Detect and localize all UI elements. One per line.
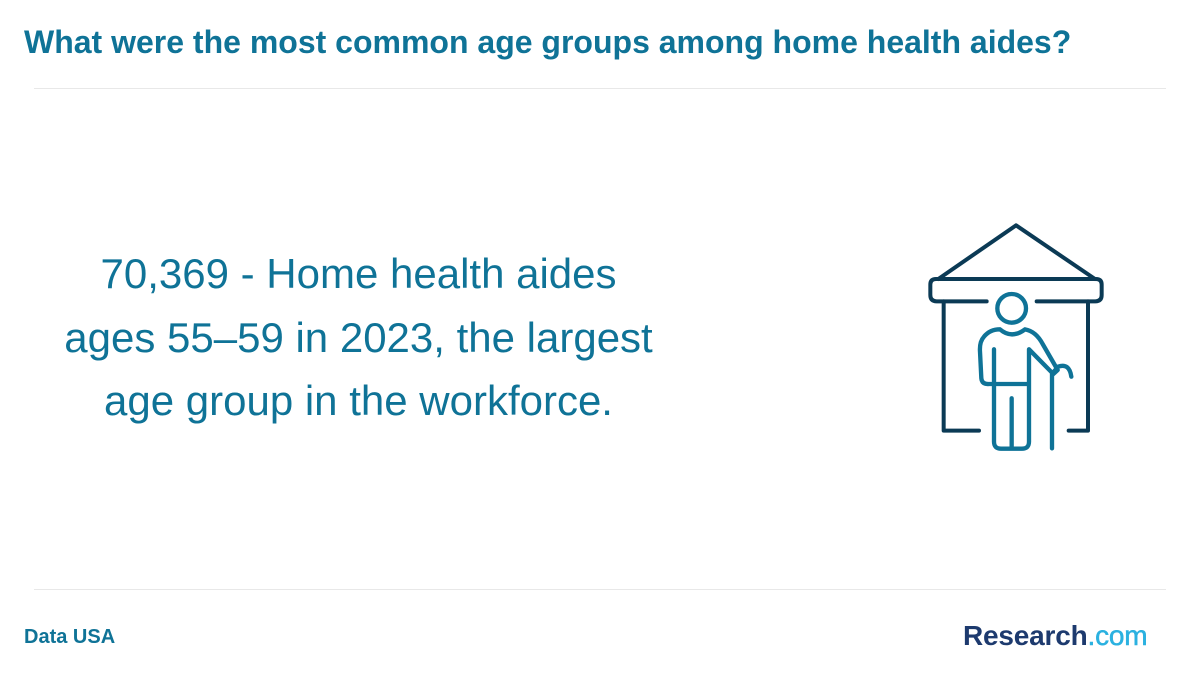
icon part: house outline [930,225,1102,431]
title: What were the most common age groups among home health aides? [24,24,1071,60]
icon part: person with cane [980,294,1071,449]
main statistic text: age group in the workforce. [104,377,613,424]
main statistic text: 70,369 - Home health aides [100,250,616,297]
icon: elderly person with cane under house [928,223,1104,451]
main statistic text: ages 55–59 in 2023, the largest [64,314,653,360]
main statistic text [64,250,653,424]
source label: Data USA [24,626,115,648]
logo: Research.com: Research.com [963,620,1147,651]
